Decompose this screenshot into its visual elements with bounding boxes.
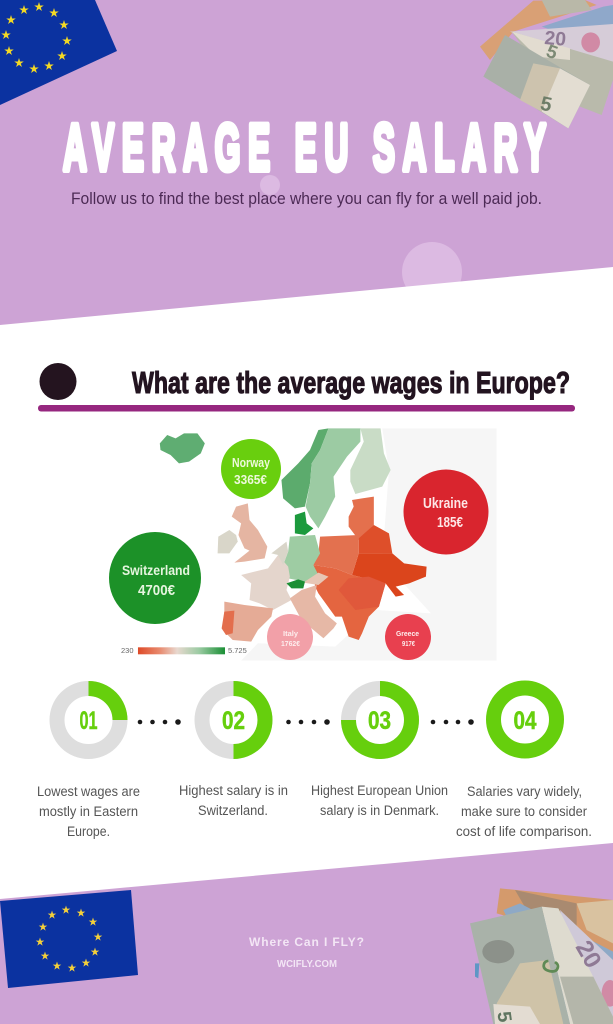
bubble: Switzerland: 4700€ [138,582,176,599]
bubble: Italy: 1762€ [281,639,301,648]
text: note 2 [179,783,288,818]
Baltics [349,497,374,540]
France [241,555,292,610]
icon: euro banknotes top right: 5 [538,93,554,117]
colour legend bar [138,647,225,654]
Ukraine [352,553,427,597]
icon: euro banknotes bottom right: 5 [492,1010,515,1024]
text: note 4: cost of life comparison. [456,824,592,839]
connector dots 1 [138,719,181,725]
donut chart 04: 04 [514,707,537,735]
United Kingdom [232,503,267,563]
donut chart 03: 03 [368,707,391,735]
text: note 1: mostly in Eastern [39,804,138,819]
text: note 3: Highest European Union [311,783,448,798]
text: note 1: Europe. [67,824,110,839]
donut chart 02: 02 [222,707,245,735]
bubble: Ukraine: 185€ [437,514,464,531]
icon: euro banknotes top right [480,0,613,128]
text: note 4 [456,784,592,839]
white central band [0,267,613,899]
Iceland [160,433,205,463]
subtitle: Follow us to find the best place where you can fly for a well paid job. [71,190,542,208]
icon: euro banknotes bottom right: C [536,957,566,976]
bubble: Greece [385,614,431,660]
Norway [281,428,328,508]
Denmark [295,512,313,535]
chart: map of European wages [109,428,496,661]
icon: EU flag bottom left [0,890,138,988]
text: note 3 [311,783,448,818]
title: AVERAGE EU SALARY [63,112,546,185]
bubble: Norway: Norway [232,456,270,470]
legend maximum value: 5.725 [228,646,247,655]
donut chart 03 [348,688,412,752]
bubble: Italy [267,614,313,660]
bubble: Switzerland: Switzerland [122,562,190,578]
Italy [290,585,337,638]
Austria [303,573,328,585]
donut chart 01: 01 [80,707,98,735]
Belarus [359,525,392,553]
bubble: Italy: Italy [283,629,299,638]
Germany [283,535,320,582]
Sweden [306,428,360,528]
Switzerland [286,579,305,588]
icon: euro banknotes top right: 20 [544,28,567,51]
donut chart 01 [57,688,120,752]
text: note 4: make sure to consider [461,804,587,819]
Spain [223,602,273,642]
donut chart 02 [202,688,265,752]
icon: euro banknotes bottom right [470,888,613,1024]
decorative translucent circles [260,175,462,302]
connector dots 2 [286,719,330,725]
Benelux [271,542,288,565]
text: note 1: Lowest wages are [37,784,140,799]
donut chart 04 [494,688,556,751]
text: note 2: Highest salary is in [179,783,288,798]
text: note 1 [37,784,140,839]
bubble: Switzerland [109,532,201,624]
footer brand name: Where Can I FLY? [249,935,364,949]
icon: dark bullet circle [40,363,76,400]
text: note 3: salary is in Denmark. [320,803,439,818]
text: note 4: Salaries vary widely, [467,784,582,799]
Romania [339,577,386,610]
legend minimum value: 230 [121,646,134,655]
connector dots 3 [431,719,474,725]
section heading [38,363,575,412]
icon: EU flag top left [0,0,117,105]
Ireland [218,530,238,553]
bubble: Greece: Greece [396,629,419,638]
bubble: Ukraine: Ukraine [423,496,468,512]
text: note 2: Switzerland. [198,803,268,818]
bubble: Greece: 917€ [402,639,416,648]
Poland [313,535,359,575]
footer website: WCIFLY.COM [277,958,337,970]
Finland [350,428,391,494]
Eastern Europe base [313,565,386,640]
map backdrop [241,428,496,661]
bubble: Ukraine [404,470,488,554]
icon: euro banknotes top right: 5 [544,40,561,63]
icon: euro banknotes bottom right: 20 [570,936,607,973]
Portugal [222,611,234,635]
bubble: Norway: 3365€ [234,472,267,487]
heading underline [38,405,575,412]
bubble: Norway [221,439,281,499]
